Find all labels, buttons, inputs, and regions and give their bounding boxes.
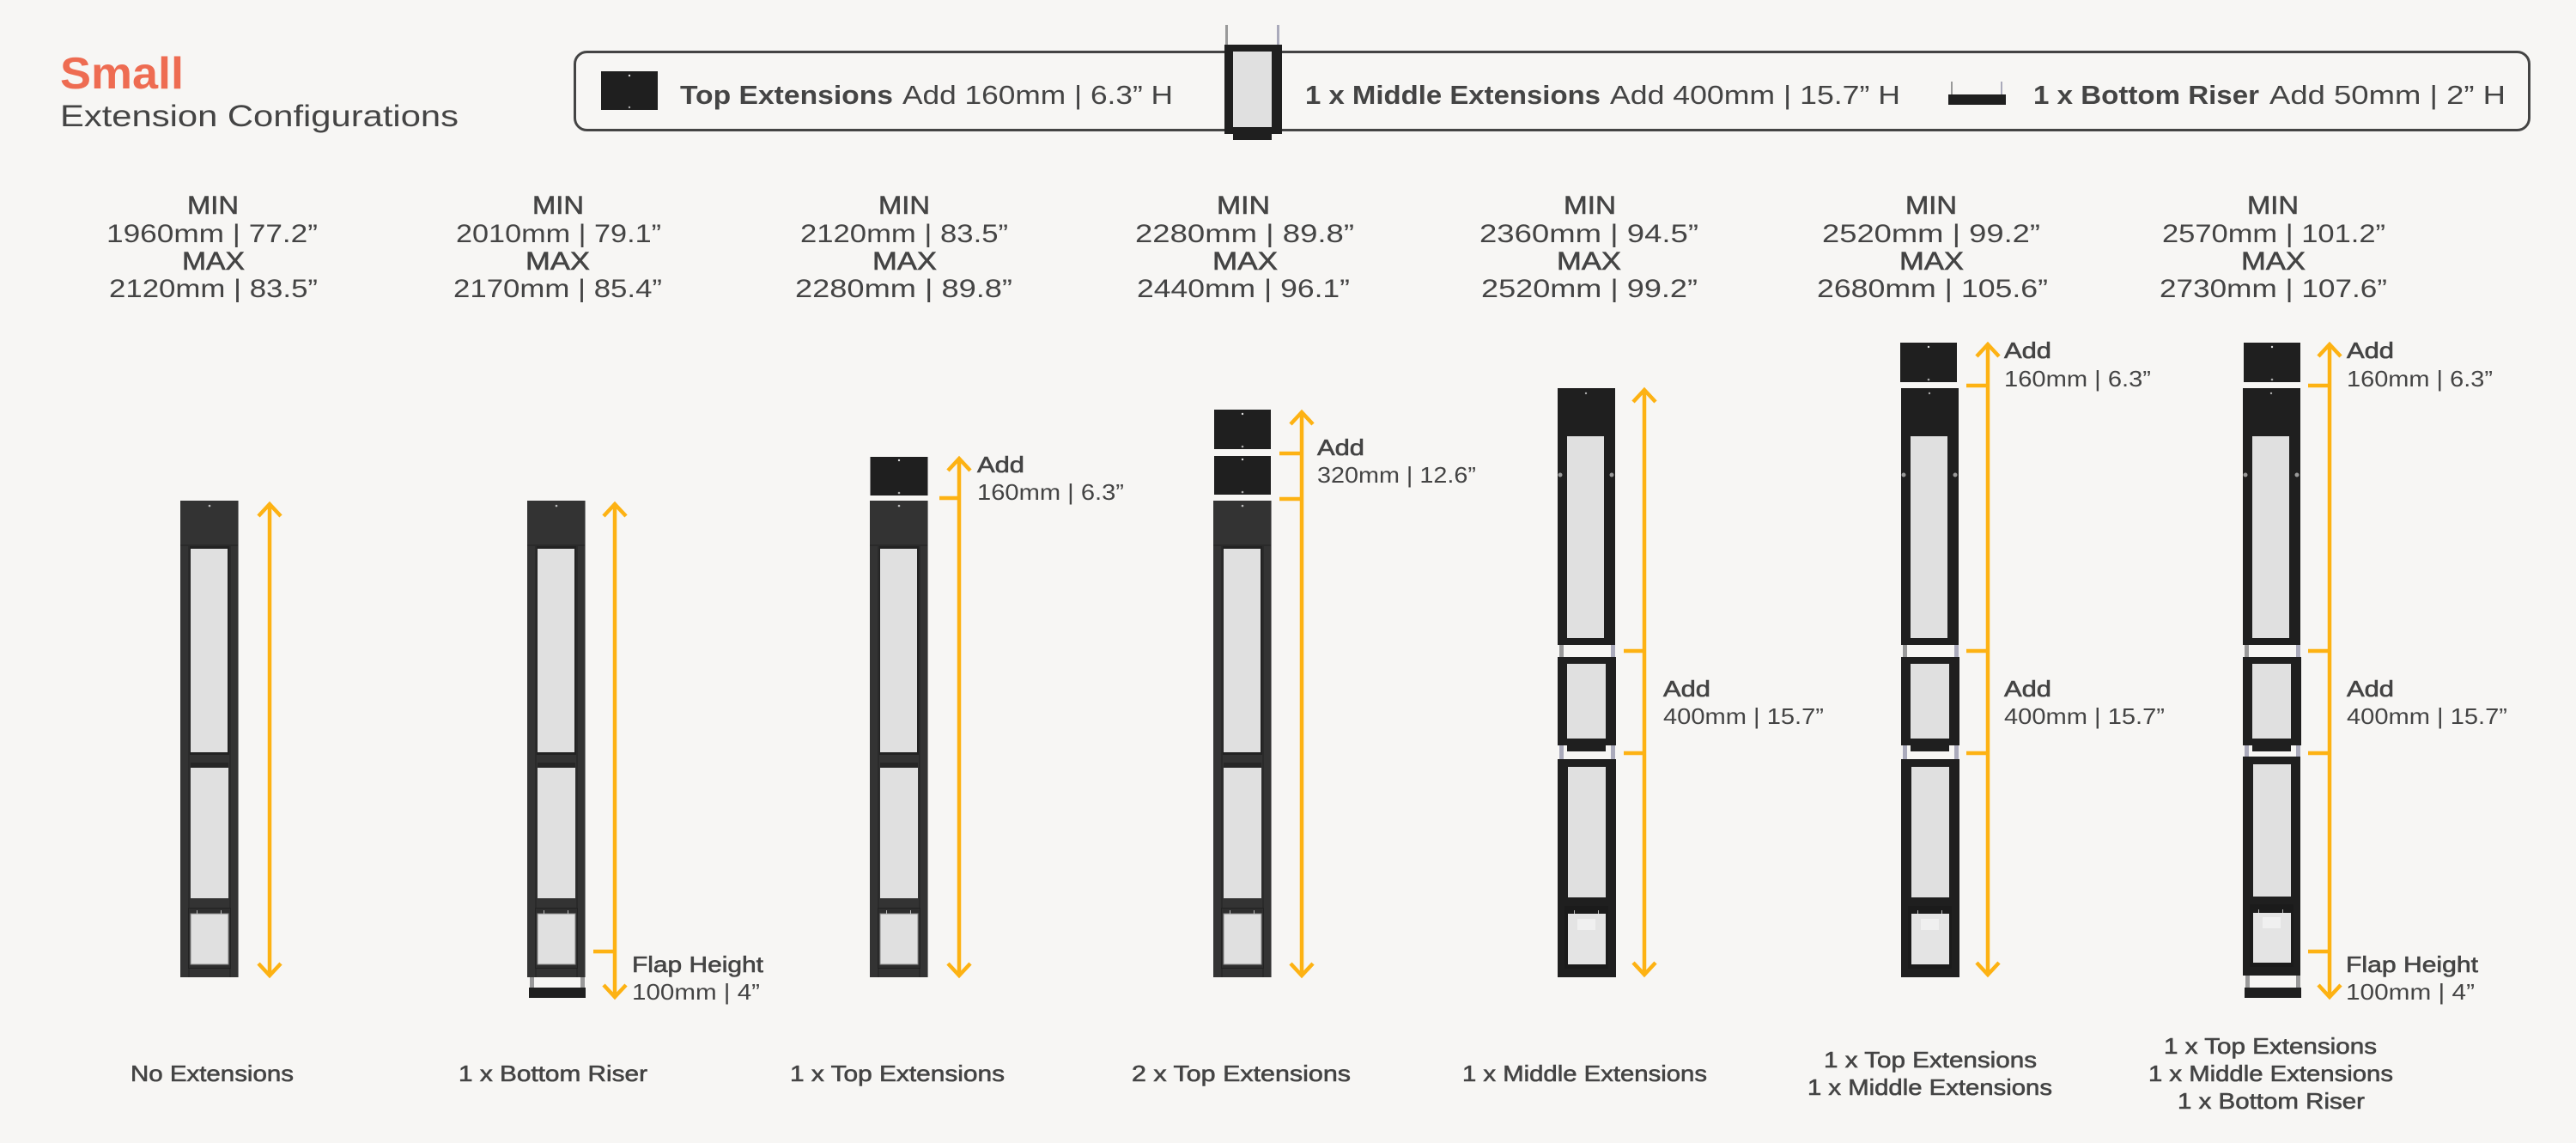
size range text: MIN	[187, 192, 239, 220]
size range text: MIN	[532, 192, 584, 220]
size range text: 2520mm | 99.2”	[1822, 220, 2040, 248]
panel: 1 x top and 1 x middle extensions	[1807, 192, 2165, 1100]
arrow: height	[258, 504, 281, 976]
size range text: MAX	[2241, 247, 2306, 276]
added height note: middle: 400mm | 15.7”	[2004, 703, 2165, 729]
size range text: MAX	[182, 247, 245, 276]
size range text	[1817, 192, 2048, 303]
size range text: 2680mm | 105.6”	[1817, 275, 2048, 303]
title: Extension Configurations	[60, 100, 459, 133]
size range text	[1135, 192, 1354, 303]
configuration label: 1 x Middle Extensions	[1462, 1061, 1707, 1086]
added height note	[1317, 435, 1476, 488]
flap height note	[2346, 951, 2479, 1005]
configuration label	[1807, 1047, 2052, 1100]
door with top and middle extensions	[1900, 343, 1959, 977]
configuration label: 2 x Top Extensions	[1132, 1061, 1351, 1086]
added height note: Add	[1317, 435, 1364, 460]
added height note: 160mm | 6.3”	[977, 479, 1124, 505]
arrow: height with extension tick	[939, 459, 970, 976]
flap height note	[632, 951, 764, 1005]
configuration label: 1 x Top Extensions	[790, 1061, 1005, 1086]
legend text: top extensions	[680, 80, 1173, 110]
legend text: top extensions: Top Extensions	[680, 80, 893, 110]
legend text: bottom riser	[2033, 80, 2506, 110]
added height note: 320mm | 12.6”	[1317, 462, 1476, 488]
configuration label: 1 x Middle Extensions	[2148, 1061, 2393, 1086]
panel: 1 x bottom riser	[453, 192, 764, 1086]
door with two top extensions	[1213, 410, 1272, 977]
configuration label	[2148, 1033, 2393, 1114]
panel: extension legend	[575, 25, 2530, 140]
added height note: top: Add	[2347, 337, 2394, 363]
size range text: 2520mm | 99.2”	[1481, 275, 1698, 303]
legend text: middle extensions: Add 400mm | 15.7” H	[1610, 80, 1900, 110]
title	[60, 49, 459, 133]
size range text	[106, 192, 318, 303]
panel: no extensions	[106, 192, 318, 1086]
size range text: 2120mm | 83.5”	[109, 275, 318, 303]
size range text: 2730mm | 107.6”	[2160, 275, 2387, 303]
size range text: MAX	[872, 247, 937, 276]
size range text: 1960mm | 77.2”	[106, 220, 318, 248]
size range text: 2570mm | 101.2”	[2162, 220, 2385, 248]
added height note: 400mm | 15.7”	[1663, 703, 1824, 729]
legend text: middle extensions: 1 x Middle Extensions	[1305, 80, 1601, 110]
flap height note: Flap Height	[632, 951, 764, 977]
icon: bottom riser	[1948, 82, 2006, 105]
added height note: top: 160mm | 6.3”	[2004, 366, 2151, 392]
added height note: top	[2004, 337, 2151, 392]
flap height note: 100mm | 4”	[2346, 979, 2475, 1005]
size range text: MAX	[1212, 247, 1278, 276]
added height note: Add	[1663, 676, 1710, 702]
size range text: MIN	[2247, 192, 2299, 220]
configuration label: 1 x Top Extensions	[1824, 1047, 2037, 1073]
configuration label: 1 x Top Extensions	[2164, 1033, 2377, 1059]
size range text: 2280mm | 89.8”	[1135, 220, 1354, 248]
arrow: height with flap tick	[593, 504, 626, 997]
legend text: top extensions: Add 160mm | 6.3” H	[902, 80, 1173, 110]
size range text	[453, 192, 662, 303]
arrow: height with extension ticks	[1966, 344, 1999, 975]
added height note	[977, 452, 1124, 505]
size range text	[2160, 192, 2387, 303]
panel: 1 x middle extensions	[1462, 192, 1824, 1086]
icon: top extension	[601, 71, 658, 110]
added height note: middle: 400mm | 15.7”	[2347, 703, 2507, 729]
added height note: top	[2347, 337, 2493, 392]
configuration label: 1 x Middle Extensions	[1807, 1074, 2052, 1100]
legend text: middle extensions	[1305, 80, 1900, 110]
added height note: Add	[977, 452, 1024, 477]
added height note: middle	[2347, 676, 2507, 729]
title: Small	[60, 49, 184, 99]
door	[180, 501, 239, 977]
size range text: MIN	[1564, 192, 1616, 220]
arrow: height with extension ticks	[1624, 390, 1656, 975]
configuration label: No Extensions	[131, 1061, 294, 1086]
size range text	[795, 192, 1012, 303]
added height note	[1663, 676, 1824, 729]
size range text: 2280mm | 89.8”	[795, 275, 1012, 303]
size range text: 2010mm | 79.1”	[456, 220, 661, 248]
legend text: bottom riser: 1 x Bottom Riser	[2033, 80, 2259, 110]
arrow: height with extension ticks	[1279, 412, 1313, 976]
size range text: MIN	[878, 192, 930, 220]
flap height note: Flap Height	[2346, 951, 2479, 977]
size range text: 2120mm | 83.5”	[800, 220, 1008, 248]
added height note: top: 160mm | 6.3”	[2347, 366, 2493, 392]
size range text: 2170mm | 85.4”	[453, 275, 662, 303]
added height note: middle: Add	[2004, 676, 2051, 702]
added height note: top: Add	[2004, 337, 2051, 363]
panel: 2 x top extensions	[1132, 192, 1476, 1086]
configuration label: 1 x Bottom Riser	[459, 1061, 647, 1086]
panel: top, middle extensions and bottom riser	[2148, 192, 2507, 1114]
added height note: middle: Add	[2347, 676, 2394, 702]
added height note: middle	[2004, 676, 2165, 729]
door with riser	[527, 501, 586, 998]
legend text: bottom riser: Add 50mm | 2” H	[2269, 80, 2506, 110]
size range text: MIN	[1217, 192, 1270, 220]
size range text: MAX	[526, 247, 590, 276]
size range text: 2360mm | 94.5”	[1479, 220, 1698, 248]
configuration label: 1 x Bottom Riser	[2178, 1088, 2365, 1114]
door with middle extension	[1558, 388, 1616, 977]
size range text	[1479, 192, 1698, 303]
arrow: height with extension and flap ticks	[2308, 344, 2341, 997]
door with top extension	[870, 457, 928, 977]
flap height note: 100mm | 4”	[632, 979, 760, 1005]
icon: middle extension	[1224, 25, 1282, 140]
size range text: MAX	[1899, 247, 1964, 276]
size range text: MAX	[1557, 247, 1621, 276]
panel: 1 x top extensions	[790, 192, 1124, 1086]
size range text: 2440mm | 96.1”	[1137, 275, 1350, 303]
size range text: MIN	[1905, 192, 1957, 220]
door with top, middle extensions and riser	[2243, 343, 2301, 998]
